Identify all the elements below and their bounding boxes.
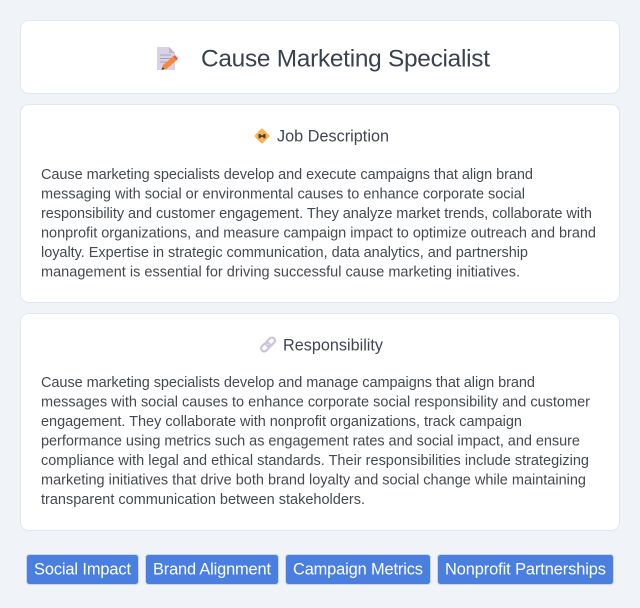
text block: responsibility: messages with social causes to enhance corporate social responsibility and customer bbox=[41, 394, 590, 410]
heading: job description: Job Description bbox=[277, 128, 389, 146]
text block: responsibility: marketing initiatives that drive both brand loyalty and social change while maintaining bbox=[41, 472, 586, 488]
icon: document with pencil bbox=[157, 47, 178, 70]
panel: responsibility bbox=[20, 314, 620, 530]
tag: Brand Alignment: Brand Alignment bbox=[153, 560, 271, 578]
tag: Campaign Metrics bbox=[286, 554, 430, 584]
icon: orange diamond bbox=[254, 128, 270, 144]
text block: responsibility: transparent communication between stakeholders. bbox=[41, 492, 365, 508]
tag: Social Impact bbox=[26, 554, 138, 584]
tag: Social Impact: Social Impact bbox=[34, 560, 131, 578]
heading: responsibility: Responsibility bbox=[283, 336, 384, 354]
title: Cause Marketing Specialist bbox=[201, 46, 490, 72]
text block: responsibility: Cause marketing specialists develop and manage campaigns that align brand bbox=[41, 375, 535, 391]
text block: responsibility bbox=[41, 375, 590, 508]
tag: Nonprofit Partnerships: Nonprofit Partnerships bbox=[445, 560, 606, 578]
text block: responsibility: engagement. They collaborate with nonprofit organizations, track campaign bbox=[41, 414, 522, 430]
text block: job description: messaging with social or environmental causes to enhance corporate social bbox=[41, 186, 525, 202]
tag: Campaign Metrics: Campaign Metrics bbox=[293, 560, 423, 578]
text block: job description: loyalty. Expertise in strategic communication, data analytics, and partnership bbox=[41, 245, 528, 261]
text block: job description: nonprofit organizations, and measure campaign impact to optimize outreach and brand bbox=[41, 226, 596, 242]
text block: responsibility: compliance with legal and ethical standards. Their responsibilities include strategizing bbox=[41, 453, 589, 469]
text block: job description bbox=[41, 167, 596, 280]
text block: job description: responsibility and customer engagement. They analyze market trends, collaborate with bbox=[41, 206, 592, 222]
panel: title card bbox=[20, 20, 620, 94]
tag: Nonprofit Partnerships bbox=[438, 554, 614, 584]
icon: link bbox=[260, 336, 276, 353]
text block: job description: management is essential for driving successful cause marketing initiatives. bbox=[41, 264, 520, 280]
panel: job description bbox=[20, 104, 620, 302]
tag: Brand Alignment bbox=[146, 554, 278, 584]
text block: responsibility: performance using metrics such as engagement rates and social impact, and ensure bbox=[41, 434, 580, 450]
text block: job description: Cause marketing specialists develop and execute campaigns that align brand bbox=[41, 167, 533, 183]
